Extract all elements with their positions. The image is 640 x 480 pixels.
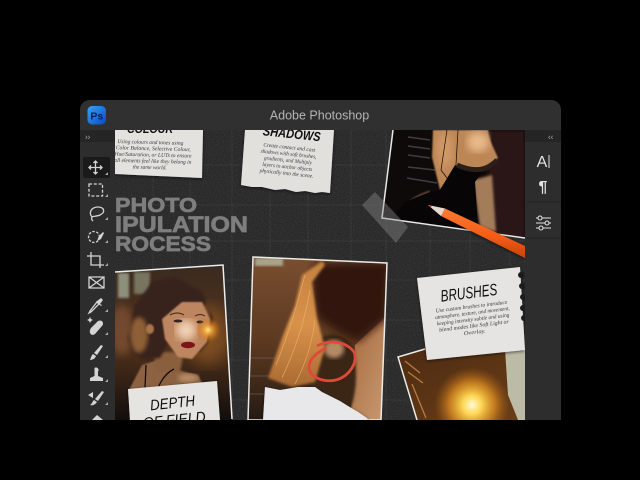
photo: depth of field portrait <box>110 265 233 420</box>
icon: character panel: A <box>537 154 548 171</box>
hair <box>128 277 213 359</box>
blonde hair <box>268 261 325 387</box>
note: colour: COLOUR <box>127 122 173 136</box>
right panel: ‹‹ <box>548 132 554 142</box>
icon: photoshop logo: Ps <box>90 110 103 122</box>
photo: hair close-up with red circle <box>248 257 390 420</box>
neck shadow and ear area <box>316 335 356 410</box>
tape <box>362 192 408 243</box>
lens flare <box>196 318 220 342</box>
neck skin <box>350 318 384 420</box>
note: shadows <box>241 123 334 193</box>
dark hair <box>312 261 390 342</box>
note: brushes: Use custom brushes to introduce <box>436 300 508 314</box>
notebook holes <box>518 272 525 322</box>
tool: marquee <box>89 184 102 196</box>
note: colour: Color Balance, Selective Colour, <box>116 145 191 153</box>
tool: eyedropper <box>89 298 103 313</box>
photo: glowing lantern <box>397 348 525 420</box>
neck <box>154 352 184 372</box>
arm <box>473 175 496 232</box>
tool: history brush <box>88 391 104 405</box>
pencil <box>428 205 525 258</box>
tool: lasso <box>90 207 104 221</box>
icon: properties sliders <box>536 216 551 230</box>
tool: crop <box>87 252 104 268</box>
left toolbar <box>80 130 115 420</box>
note: shadows: SHADOWS <box>262 123 322 144</box>
tool: clone stamp <box>90 367 103 381</box>
back and shoulder <box>432 130 498 190</box>
shoulders <box>130 360 205 420</box>
tool: move <box>83 157 110 178</box>
label: depth of field <box>128 381 220 420</box>
heading: photo manipulation process <box>116 198 247 252</box>
note: shadows: gradients, and Multiply <box>264 156 313 167</box>
note: brushes: Overlay. <box>464 329 486 337</box>
photoshop mockup scene <box>80 100 561 420</box>
tool: frame <box>89 277 104 288</box>
icon: paragraph panel: ¶ <box>539 179 548 196</box>
window title: Adobe Photoshop <box>270 108 369 122</box>
tool group corner marks <box>105 172 108 405</box>
heading: photo manipulation process: IPULATION <box>115 212 248 237</box>
heading: photo manipulation process: ROCESS <box>115 233 211 256</box>
ear <box>146 324 154 334</box>
note: shadows: layers to anchor objects <box>262 162 312 173</box>
note: colour: Hue/Saturation, or LUTs to ensure <box>113 151 192 160</box>
note: shadows: shadows with soft brushes, <box>260 148 317 160</box>
note: brushes <box>417 267 527 360</box>
note: brushes: keeping intensity subtle and using <box>437 313 510 327</box>
note: brushes: BRUSHES <box>440 281 498 306</box>
icon: photoshop logo <box>88 106 106 124</box>
note: brushes: atmosphere, texture, and movement, <box>435 306 511 321</box>
note: colour: the same world. <box>133 164 167 171</box>
note: shadows: physically into the scene. <box>258 168 314 180</box>
tool: brush <box>90 345 103 360</box>
tool: eraser <box>92 415 103 420</box>
photo: woman's back with black dress <box>380 130 526 240</box>
note: colour: Using colours and tones using <box>117 139 184 147</box>
torn paper <box>263 387 368 420</box>
label: depth of field: DEPTH <box>149 393 196 414</box>
tool: healing brush <box>87 317 103 335</box>
dress <box>398 165 479 224</box>
heading: photo manipulation process: PHOTO <box>115 194 197 217</box>
tool: quick selection <box>88 232 104 242</box>
left toolbar: ›› <box>85 132 91 142</box>
application window <box>80 100 561 443</box>
canvas: mood board <box>115 130 525 420</box>
right panel <box>525 130 561 420</box>
note: colour <box>115 130 204 180</box>
eyes and lips <box>174 320 182 322</box>
face <box>162 302 210 359</box>
chair curve <box>408 190 430 200</box>
title bar <box>80 100 561 130</box>
note: brushes: blend modes like Soft Light or <box>439 318 510 334</box>
red circle annotation <box>309 342 355 381</box>
label: depth of field: OF FIELD <box>142 409 207 432</box>
note: colour: all elements feel like they belong in <box>114 157 192 166</box>
note: shadows: Create contact and cast <box>263 142 316 154</box>
